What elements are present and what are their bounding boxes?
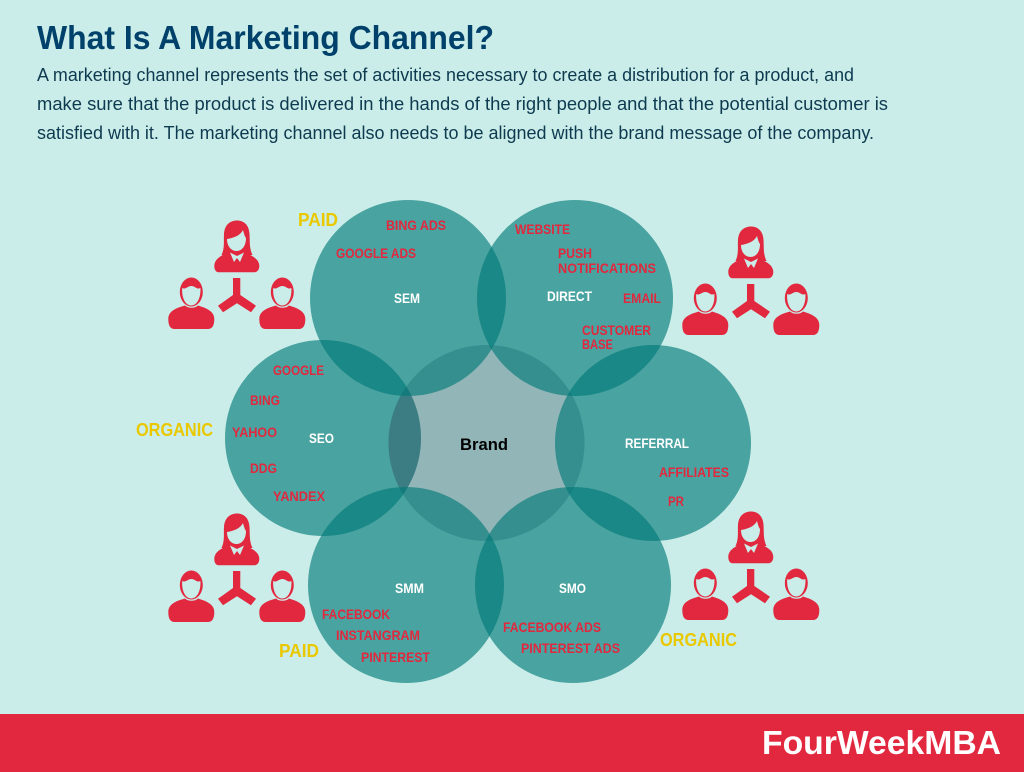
SMO labels: SMO [559,580,586,596]
REFERRAL labels: AFFILIATES [659,464,729,480]
label: ORGANIC bottom right: ORGANIC [660,630,737,650]
SEO labels: YAHOO [232,424,277,440]
icon: people group bottom left [168,514,305,622]
DIRECT labels: CUSTOMER [582,322,651,338]
SMO labels: PINTEREST ADS [521,640,620,656]
SEM labels: GOOGLE ADS [336,245,416,261]
DIRECT labels: EMAIL [623,290,661,306]
icon: people group top right [682,226,819,335]
center label: Brand: Brand [460,435,508,454]
SEM labels: BING ADS [386,217,446,233]
SEO labels: SEO [309,430,334,446]
DIRECT labels: PUSH [558,245,592,261]
SEO labels: YANDEX [273,488,326,504]
description text: make sure that the product is delivered in the hands of the right people and that the potential customer is [37,94,888,114]
SEO labels: GOOGLE [273,362,324,378]
description text: A marketing channel represents the set of activities necessary to create a distribution for a product, and [37,65,854,85]
DIRECT labels: NOTIFICATIONS [558,260,656,276]
DIRECT labels: DIRECT [547,288,592,304]
icon: people group top left [168,220,305,329]
SEO labels: BING [250,392,280,408]
DIRECT labels: BASE [582,336,613,352]
label: ORGANIC left: ORGANIC [136,420,213,440]
description text [37,65,888,143]
footer brand: FourWeekMBA [762,724,1001,761]
SMM labels [322,580,430,665]
SMM labels: SMM [395,580,424,596]
SMM labels: PINTEREST [361,649,430,665]
title: What Is A Marketing Channel? [37,19,494,56]
REFERRAL labels: PR [668,493,684,509]
SMM labels: FACEBOOK [322,606,390,622]
SEM labels [336,217,446,306]
SEO labels: DDG [250,460,277,476]
label: PAID top: PAID [298,210,338,230]
SMM labels: INSTANGRAM [336,627,420,643]
REFERRAL labels [625,435,729,509]
venn diagram circles [225,200,751,683]
SMO labels [503,580,620,656]
icon: people group bottom right [682,512,819,620]
description text: satisfied with it. The marketing channel also needs to be aligned with the brand message of the company. [37,123,874,143]
SEO labels [232,362,334,504]
DIRECT labels [515,221,661,352]
label: PAID bottom: PAID [279,641,319,661]
footer bar [0,714,1024,772]
DIRECT labels: WEBSITE [515,221,570,237]
REFERRAL labels: REFERRAL [625,435,689,451]
SEM labels: SEM [394,290,420,306]
SMO labels: FACEBOOK ADS [503,619,601,635]
